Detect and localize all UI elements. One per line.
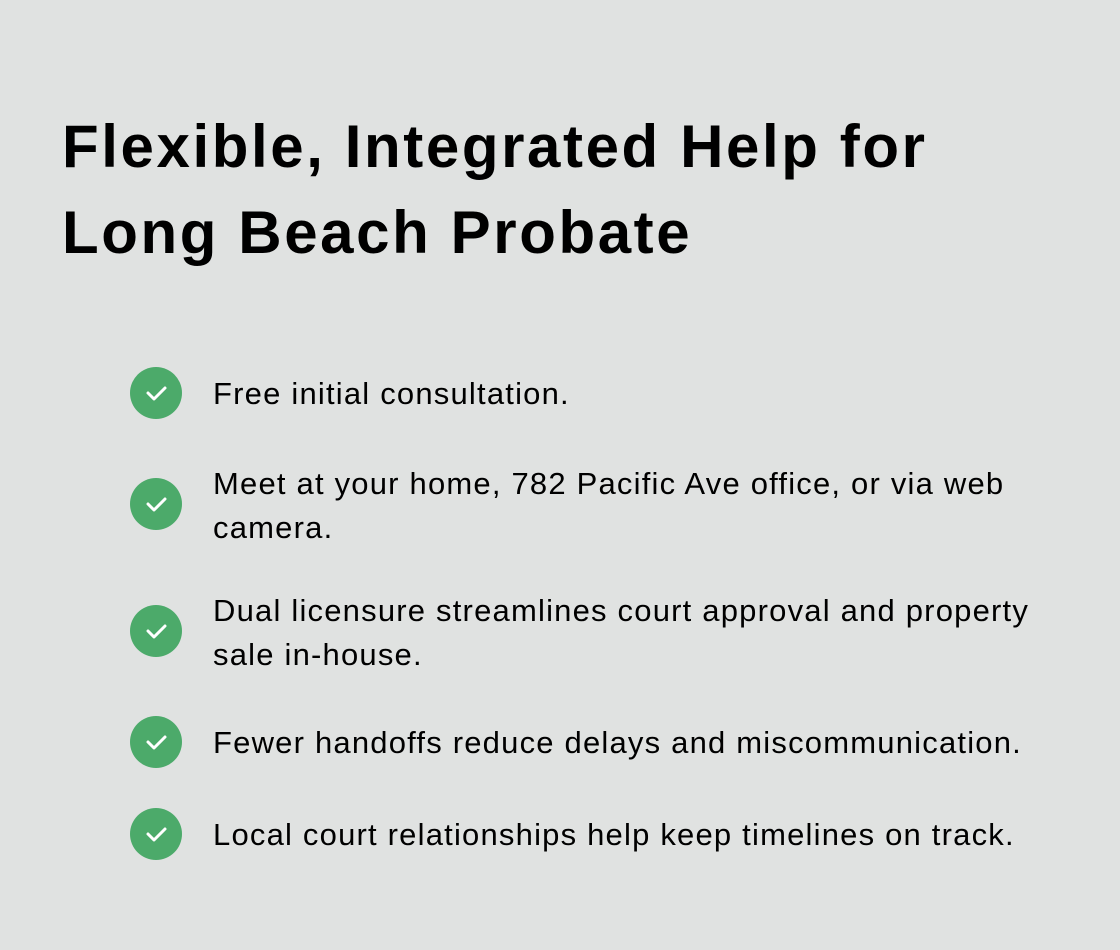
title: Flexible, Integrated Help for (62, 113, 928, 180)
item 2 (130, 466, 1004, 545)
text: Dual licensure streamlines court approval and property (213, 593, 1029, 628)
text (213, 593, 1029, 672)
icon: check (130, 808, 182, 860)
icon: check (130, 478, 182, 530)
title (62, 113, 928, 266)
text: Free initial consultation. (213, 376, 570, 411)
text: Local court relationships help keep timelines on track. (213, 817, 1015, 852)
icon: check (130, 716, 182, 768)
item 4 (130, 716, 1022, 768)
text: sale in-house. (213, 637, 423, 672)
title: Long Beach Probate (62, 199, 692, 266)
item 3 (130, 593, 1029, 672)
text: Fewer handoffs reduce delays and miscommunication. (213, 725, 1022, 760)
item 5 (130, 808, 1015, 860)
icon: check (130, 605, 182, 657)
text: Meet at your home, 782 Pacific Ave office, or via web (213, 466, 1004, 501)
text (213, 466, 1004, 545)
icon: check (130, 367, 182, 419)
item 1 (130, 367, 570, 419)
text: camera. (213, 510, 333, 545)
